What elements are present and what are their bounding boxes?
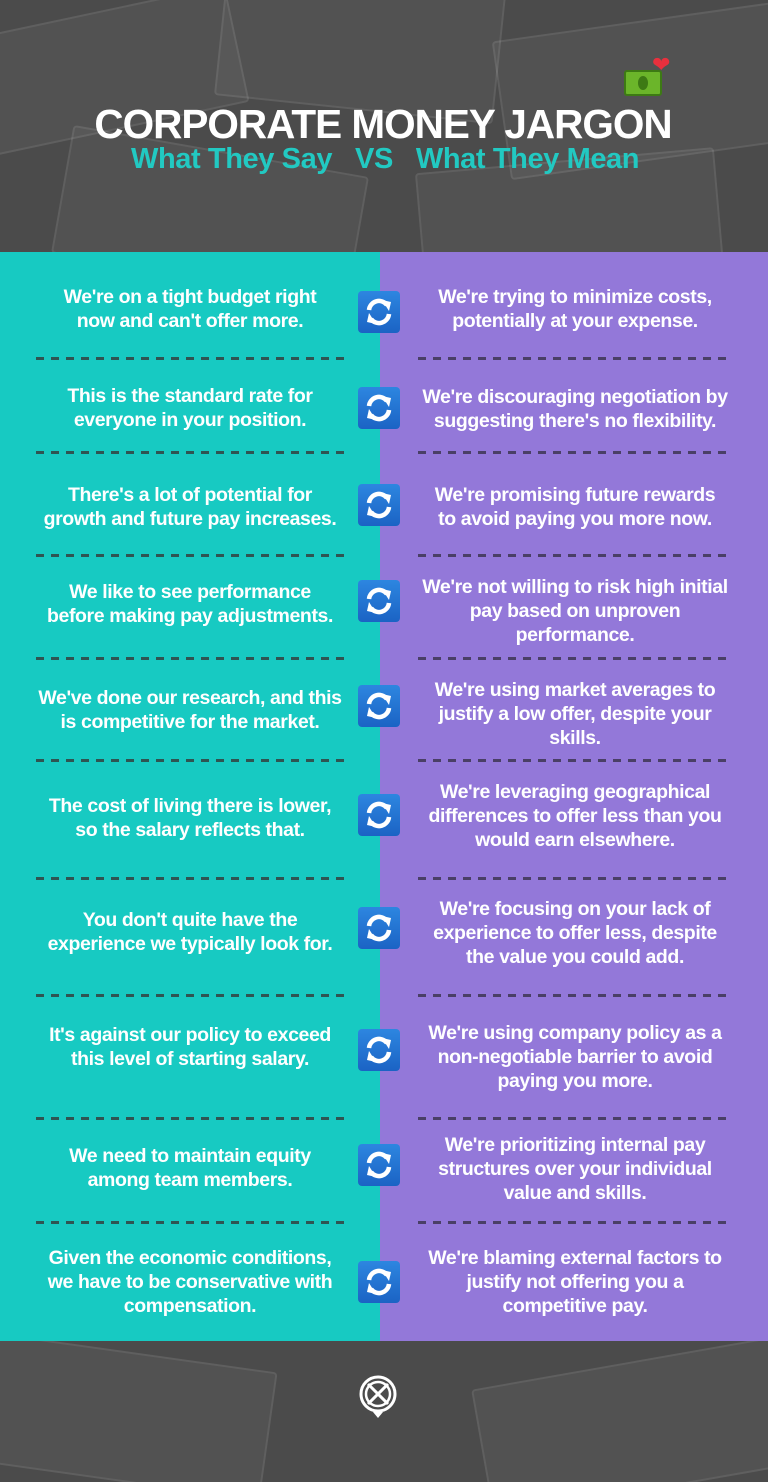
text: competitive pay.: [503, 1295, 647, 1317]
row 6: [49, 781, 722, 851]
text: is competitive for the market.: [61, 711, 319, 733]
row 9: [69, 1134, 712, 1204]
text: This is the standard rate for: [67, 385, 313, 407]
title: CORPORATE MONEY JARGON: [94, 101, 672, 147]
text: We've done our research, and this: [38, 687, 342, 709]
text: so the salary reflects that.: [75, 819, 305, 841]
row 8: [49, 1022, 722, 1092]
text: performance.: [516, 624, 634, 646]
text: we have to be conservative with: [48, 1271, 332, 1293]
icon: swap: [358, 794, 400, 836]
text: growth and future pay increases.: [44, 508, 336, 530]
text: pay based on unproven: [470, 600, 680, 622]
text: justify a low offer, despite your: [439, 703, 711, 725]
text: We're leveraging geographical: [440, 781, 710, 803]
text: We need to maintain equity: [69, 1145, 311, 1167]
text: paying you more.: [497, 1070, 653, 1092]
text: the value you could add.: [466, 946, 684, 968]
text: It's against our policy to exceed: [49, 1024, 331, 1046]
text: We're trying to minimize costs,: [438, 286, 712, 308]
icon: logo: [360, 1376, 396, 1418]
text: potentially at your expense.: [452, 310, 698, 332]
text: Given the economic conditions,: [49, 1247, 331, 1269]
icon: swap: [358, 907, 400, 949]
text: The cost of living there is lower,: [49, 795, 331, 817]
icon: swap: [358, 685, 400, 727]
icon: money with heart: [624, 52, 670, 96]
text: There's a lot of potential for: [68, 484, 312, 506]
text: We're using company policy as a: [428, 1022, 722, 1044]
text: We like to see performance: [69, 581, 311, 603]
icon: swap: [358, 1261, 400, 1303]
panel: what they say: [0, 252, 380, 1341]
text: We're promising future rewards: [435, 484, 715, 506]
text: compensation.: [124, 1295, 256, 1317]
text: We're on a tight budget right: [64, 286, 316, 308]
text: We're using market averages to: [435, 679, 715, 701]
text: value and skills.: [504, 1182, 646, 1204]
text: skills.: [549, 727, 601, 749]
text: this level of starting salary.: [71, 1048, 309, 1070]
text: experience to offer less, despite: [433, 922, 717, 944]
text: We're blaming external factors to: [428, 1247, 722, 1269]
text: We're discouraging negotiation by: [422, 386, 728, 408]
icon: swap: [358, 580, 400, 622]
row 2: [67, 385, 728, 432]
row 5: [38, 679, 715, 749]
text: to avoid paying you more now.: [438, 508, 712, 530]
text: We're focusing on your lack of: [440, 898, 710, 920]
icon: swap: [358, 1029, 400, 1071]
text: suggesting there's no flexibility.: [434, 410, 716, 432]
header background: [0, 0, 768, 252]
icon: money with heart: ❤: [652, 52, 670, 77]
text: everyone in your position.: [74, 409, 306, 431]
text: now and can't offer more.: [77, 310, 303, 332]
text: before making pay adjustments.: [47, 605, 333, 627]
panel: what they mean: [380, 252, 768, 1341]
text: justify not offering you a: [466, 1271, 684, 1293]
row 10: [48, 1247, 722, 1317]
icon: swap: [358, 387, 400, 429]
text: experience we typically look for.: [48, 933, 332, 955]
text: We're not willing to risk high initial: [422, 576, 728, 598]
text: would earn elsewhere.: [475, 829, 675, 851]
text: structures over your individual: [438, 1158, 712, 1180]
text: differences to offer less than you: [428, 805, 722, 827]
text: among team members.: [88, 1169, 292, 1191]
text: non-negotiable barrier to avoid: [438, 1046, 712, 1068]
footer background: [0, 1341, 768, 1482]
row 3: [44, 484, 715, 530]
subtitle: What They Say VS What They Mean: [131, 143, 639, 175]
icon: swap: [358, 484, 400, 526]
text: You don't quite have the: [83, 909, 297, 931]
icon: swap: [358, 1144, 400, 1186]
text: We're prioritizing internal pay: [445, 1134, 705, 1156]
icon: swap: [358, 291, 400, 333]
row 4: [47, 576, 728, 646]
row 1: [64, 286, 712, 333]
row 7: [48, 898, 717, 968]
dividers: [36, 357, 726, 1224]
